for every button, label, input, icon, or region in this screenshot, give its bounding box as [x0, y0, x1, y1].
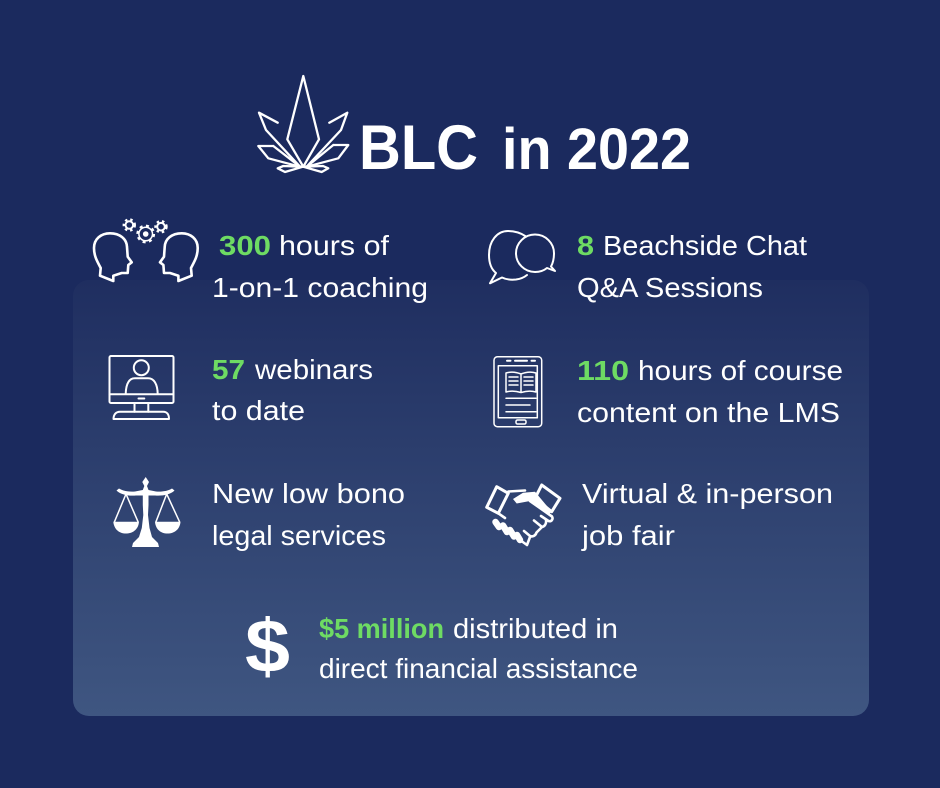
text: job fair: job fair: [581, 520, 675, 551]
icon: BLC leaf logo: [258, 76, 348, 172]
text: webinars: [212, 354, 373, 426]
panel: highlights background: [73, 280, 869, 716]
text: beachside chat: [577, 230, 807, 303]
text: job fair: Virtual & in-person: [582, 478, 833, 509]
text: job fair: [581, 478, 833, 551]
title: in 2022: [502, 117, 691, 182]
text: coaching hours: 1-on-1 coaching: [212, 272, 428, 303]
icon: two heads with gears: [94, 220, 198, 281]
text: financial assistance: [319, 613, 638, 684]
icon: handshake: [487, 485, 560, 545]
text: webinars: webinars: [254, 354, 373, 385]
icon: scales of justice: [113, 477, 180, 547]
text: beachside chat: Q&A Sessions: [577, 272, 763, 303]
text: financial assistance: distributed in: [453, 613, 618, 644]
text: beachside chat: Beachside Chat: [603, 230, 807, 261]
text: financial assistance: direct financial assistance: [319, 653, 638, 684]
icon: webinar monitor: [110, 356, 174, 419]
text: beachside chat: 8: [577, 230, 594, 261]
icon: chat bubbles: [489, 231, 555, 283]
text: webinars: 57: [212, 354, 245, 385]
text: course content: content on the LMS: [577, 397, 840, 428]
text: coaching hours: [212, 230, 428, 303]
title: [359, 113, 691, 183]
text: coaching hours: 300: [219, 230, 271, 261]
text: legal services: [212, 478, 405, 551]
text: legal services: New low bono: [212, 478, 405, 509]
text: legal services: legal services: [212, 520, 386, 551]
icon: tablet with book: [494, 357, 542, 427]
icon: dollar sign: $: [245, 604, 290, 688]
text: course content: 110: [577, 355, 629, 386]
text: course content: [577, 355, 843, 428]
text: course content: hours of course: [638, 355, 843, 386]
text: webinars: to date: [212, 395, 305, 426]
title: BLC: [359, 113, 478, 183]
text: coaching hours: hours of: [279, 230, 389, 261]
text: financial assistance: $5 million: [319, 613, 444, 644]
